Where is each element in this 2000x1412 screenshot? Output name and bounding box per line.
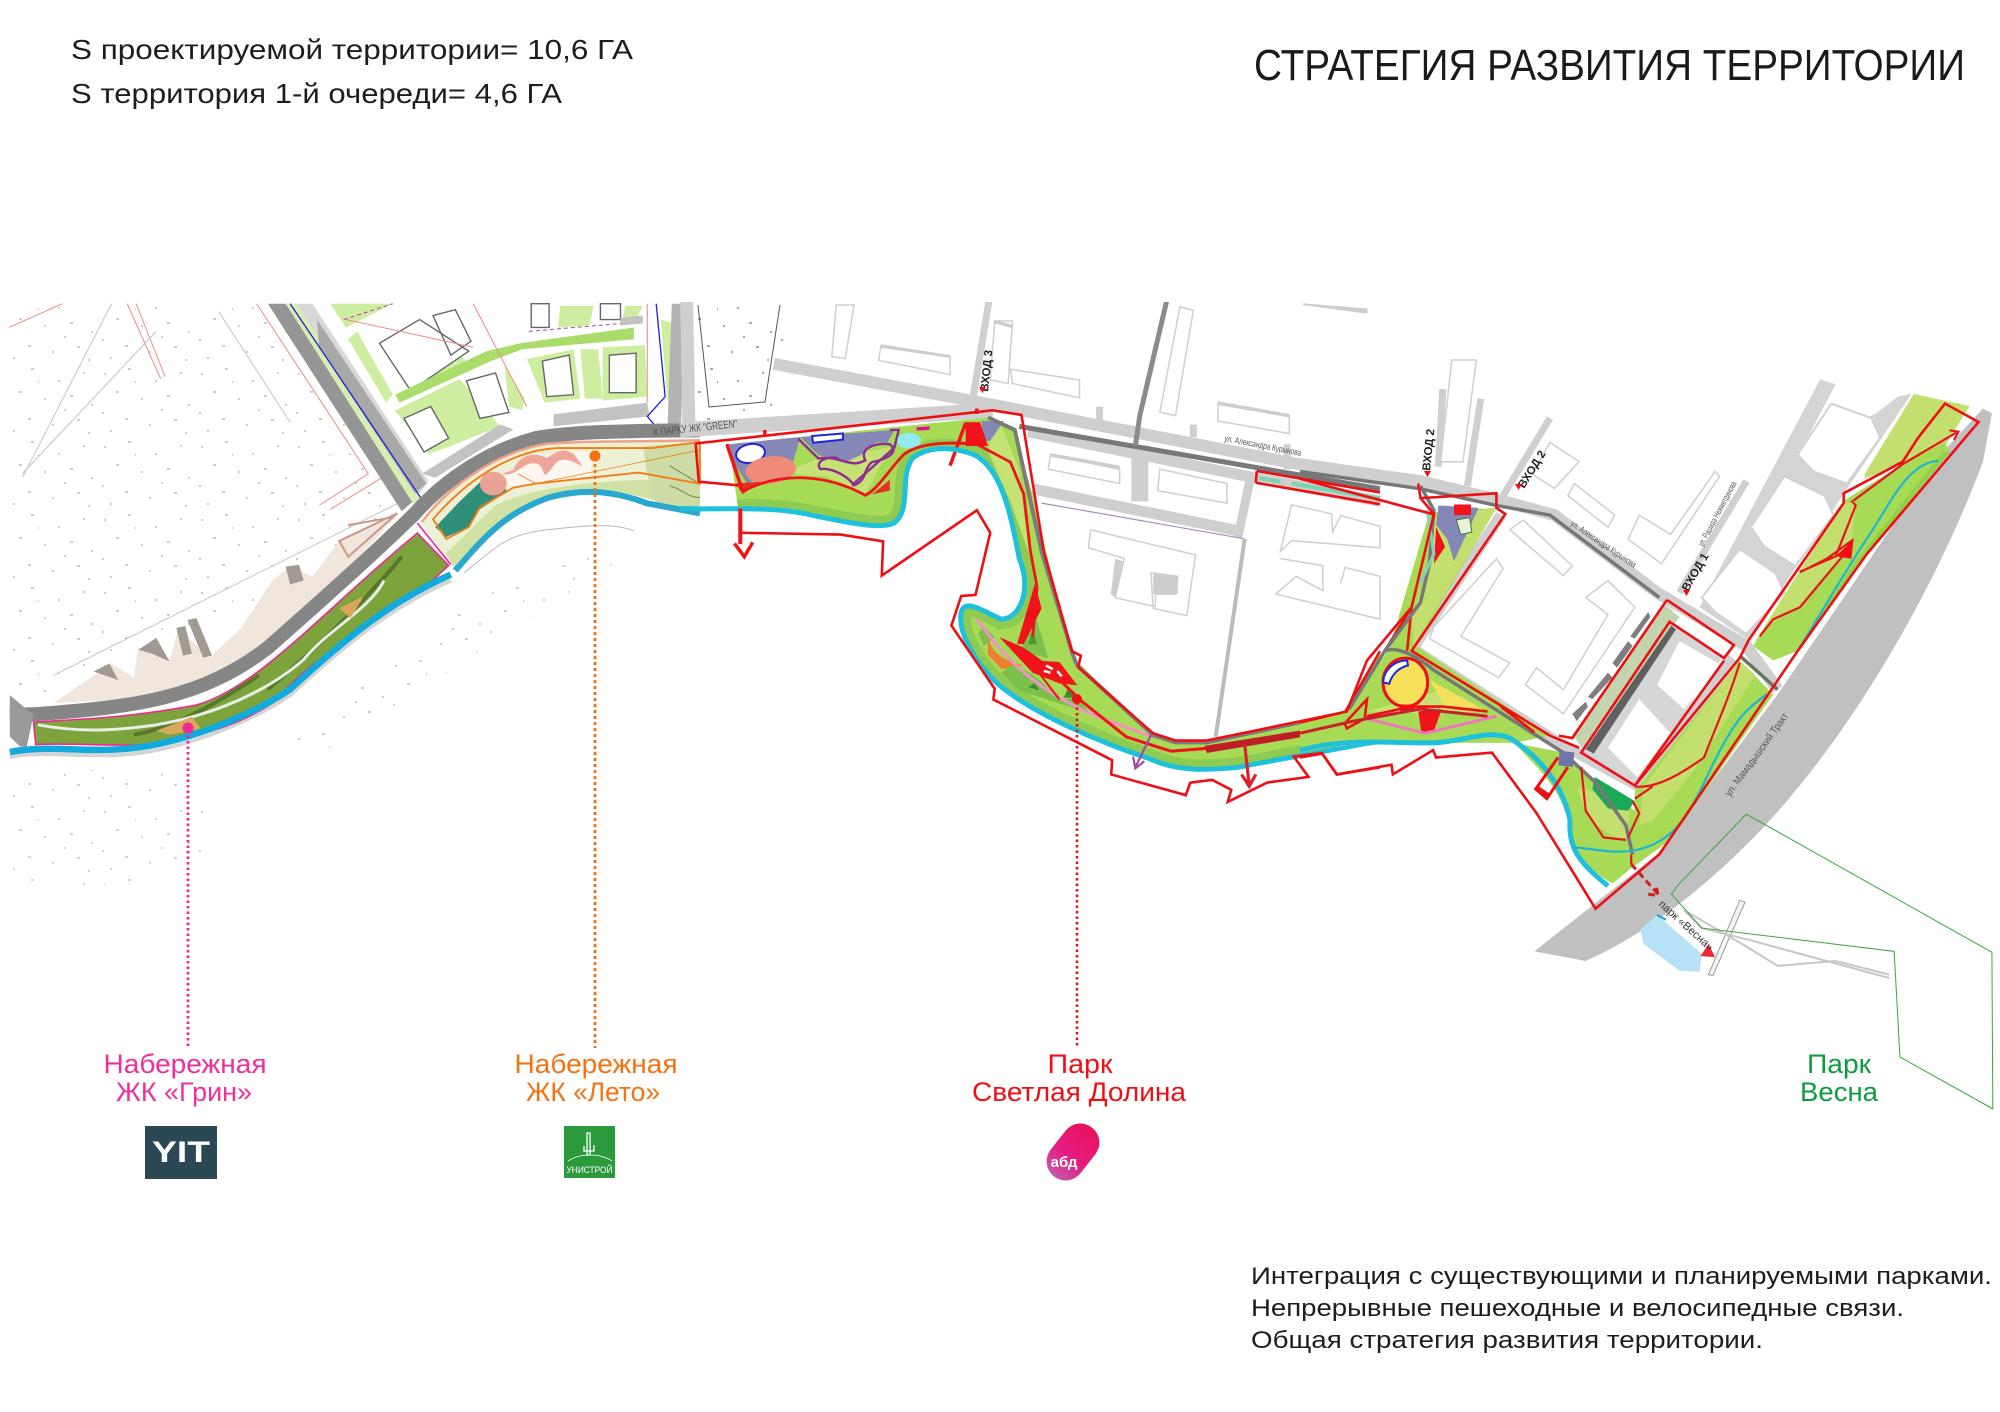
footbridge xyxy=(1708,900,1745,976)
street labels: ВХОД 2 xyxy=(1421,428,1437,471)
river west xyxy=(10,575,451,752)
integration note: Непрерывные пешеходные и велосипедные связи. xyxy=(1251,1295,1904,1322)
residential ground east xyxy=(1700,379,1912,640)
label: Vesna park xyxy=(1800,1049,1879,1107)
lower survey strip xyxy=(10,581,451,757)
embankment Grin greenery xyxy=(33,533,449,745)
logo: ABG: абд xyxy=(1051,1154,1078,1171)
park greenery xyxy=(680,409,1380,769)
dashed link to park Vesna xyxy=(1631,864,1658,896)
street labels: ВХОД 1 xyxy=(1680,551,1712,594)
logo: Unistroy xyxy=(564,1126,615,1178)
street labels: ВХОД 3 xyxy=(979,349,995,392)
river central xyxy=(680,449,1380,769)
street labels: ул. Мамадышский Тракт xyxy=(1723,711,1791,799)
demolished area xyxy=(54,515,397,703)
river east xyxy=(1300,735,1608,886)
area summary text: S территория 1-й очереди= 4,6 ГА xyxy=(71,78,562,109)
logo: YIT xyxy=(145,1126,217,1179)
leader: Svetlaya Dolina xyxy=(1072,694,1082,1048)
integration note xyxy=(1251,1263,1992,1354)
streets xyxy=(680,301,1380,537)
Leto boundary xyxy=(433,442,700,539)
site plan map xyxy=(9,301,1993,1109)
label: Svetlaya Dolina park: Светлая Долина xyxy=(972,1077,1187,1107)
leader: Leto xyxy=(590,450,600,1048)
street labels: ул. Александра Курынова xyxy=(1224,433,1302,458)
leader: Grin xyxy=(182,722,194,1048)
integration note: Интеграция с существующими и планируемыми парками. xyxy=(1251,1263,1992,1290)
pedestrian routes east xyxy=(1581,430,1958,864)
label: Vesna park: Парк xyxy=(1807,1049,1871,1079)
east section: courtyard and Mamadyshsky tract xyxy=(1300,360,1993,1109)
Vesna paths xyxy=(1684,910,1889,978)
red project boundary east xyxy=(1300,404,1979,909)
residential block xyxy=(308,304,685,478)
buildings xyxy=(1429,360,1880,784)
street labels xyxy=(653,349,1791,954)
label: Grin embankment: ЖК «Грин» xyxy=(116,1077,252,1107)
label: Svetlaya Dolina park: Парк xyxy=(1048,1049,1113,1079)
area summary text: S проектируемой территории= 10,6 ГА xyxy=(71,34,633,65)
label: Grin embankment xyxy=(104,1049,266,1107)
courtyard linear garden xyxy=(1573,605,1679,750)
red project boundary central xyxy=(696,410,1380,802)
east green parks xyxy=(1514,394,1970,883)
logo: ABG xyxy=(1039,1116,1107,1188)
entrance markers xyxy=(979,387,1690,596)
label: Leto embankment: ЖК «Лето» xyxy=(526,1077,660,1107)
streets xyxy=(1300,389,1778,787)
west of courtyard greenery xyxy=(1300,486,1633,854)
label: Grin embankment: Набережная xyxy=(104,1049,266,1079)
diagonal street xyxy=(268,304,665,511)
west section: Green embankment xyxy=(9,304,700,757)
big road xyxy=(1534,408,1992,961)
Vesna pond xyxy=(1640,915,1702,972)
label: Leto embankment: Набережная xyxy=(514,1049,678,1079)
arrows xyxy=(734,508,1256,786)
park Vesna boundary xyxy=(1671,814,1993,1109)
area summary text xyxy=(71,34,633,109)
street labels: ул. Рашида Нежметдинова xyxy=(1696,480,1739,548)
label: Svetlaya Dolina park xyxy=(972,1049,1187,1107)
central section: Svetlaya Dolina park xyxy=(680,301,1380,802)
logo: Unistroy: УНИСТРОЙ xyxy=(566,1164,612,1175)
buildings xyxy=(832,303,1380,619)
street labels: К ПАРКУ ЖК "GREEN" xyxy=(653,418,738,439)
street labels: ВХОД 2 xyxy=(1516,449,1549,491)
Leto embankment area xyxy=(422,440,700,571)
integration note: Общая стратегия развития территории. xyxy=(1251,1327,1763,1354)
logo: YIT: YIT xyxy=(152,1136,210,1169)
label: Leto embankment xyxy=(514,1049,678,1107)
main road west xyxy=(10,430,700,715)
survey base layer xyxy=(10,303,790,885)
label: Vesna park: Весна xyxy=(1800,1077,1879,1107)
street labels: парк «Весна» xyxy=(1656,898,1716,954)
street labels: ул. Александра Курынова xyxy=(1569,518,1638,570)
Vesna marker xyxy=(1700,944,1715,957)
